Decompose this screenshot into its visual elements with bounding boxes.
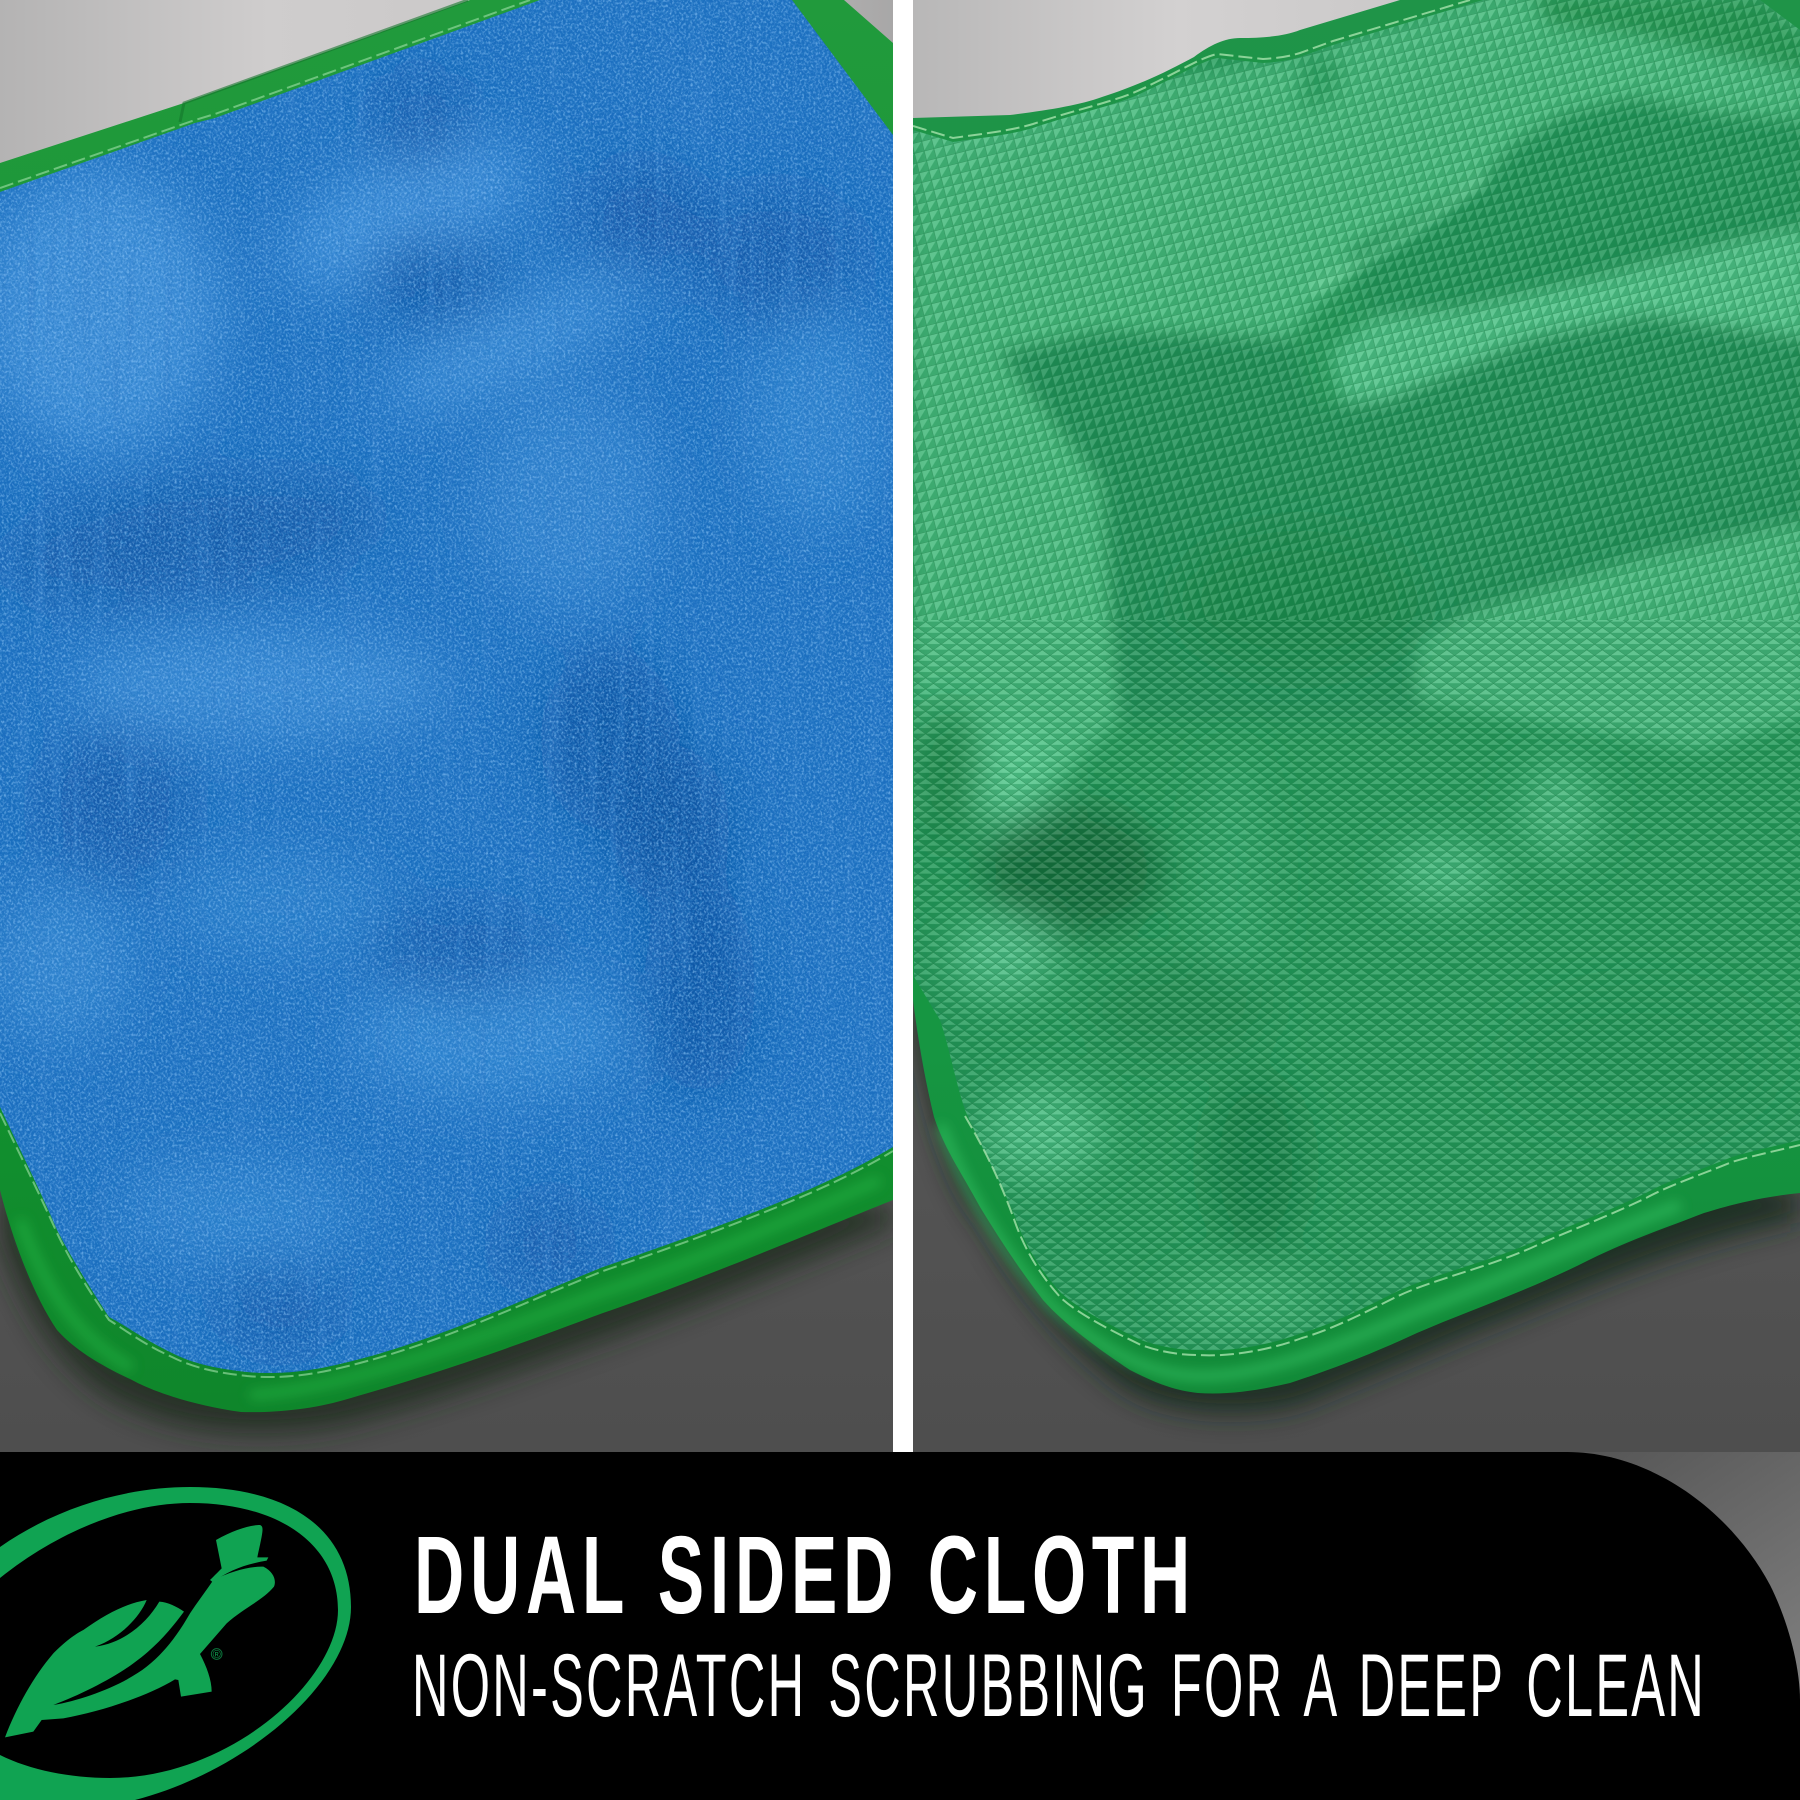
stitching, green side (913, 0, 1800, 1355)
logo oval ring (0, 1487, 351, 1800)
logo: turtle in oval (0, 1487, 351, 1800)
green binding edge, green side (913, 0, 1800, 1393)
heading: dual sided cloth: DUAL SIDED CLOTH (414, 1514, 1196, 1637)
green textured cloth surface (910, 0, 1800, 1452)
stitching, blue side (0, 0, 893, 1377)
registered mark: ® (213, 1649, 221, 1661)
banner: black caption bar with rounded corner (0, 1452, 1800, 1800)
icon: turtle with top hat (5, 1525, 275, 1737)
green binding edge, blue side (0, 0, 893, 1412)
cloth shadow on green side (913, 1000, 1800, 1413)
background steel behind banner corner (1560, 1452, 1800, 1800)
blue terry cloth surface (0, 0, 893, 1452)
cloth shadow on blue side (0, 1190, 893, 1433)
panel: blue microfiber side (0, 0, 893, 1452)
panel: green diamond-weave side (910, 0, 1800, 1452)
